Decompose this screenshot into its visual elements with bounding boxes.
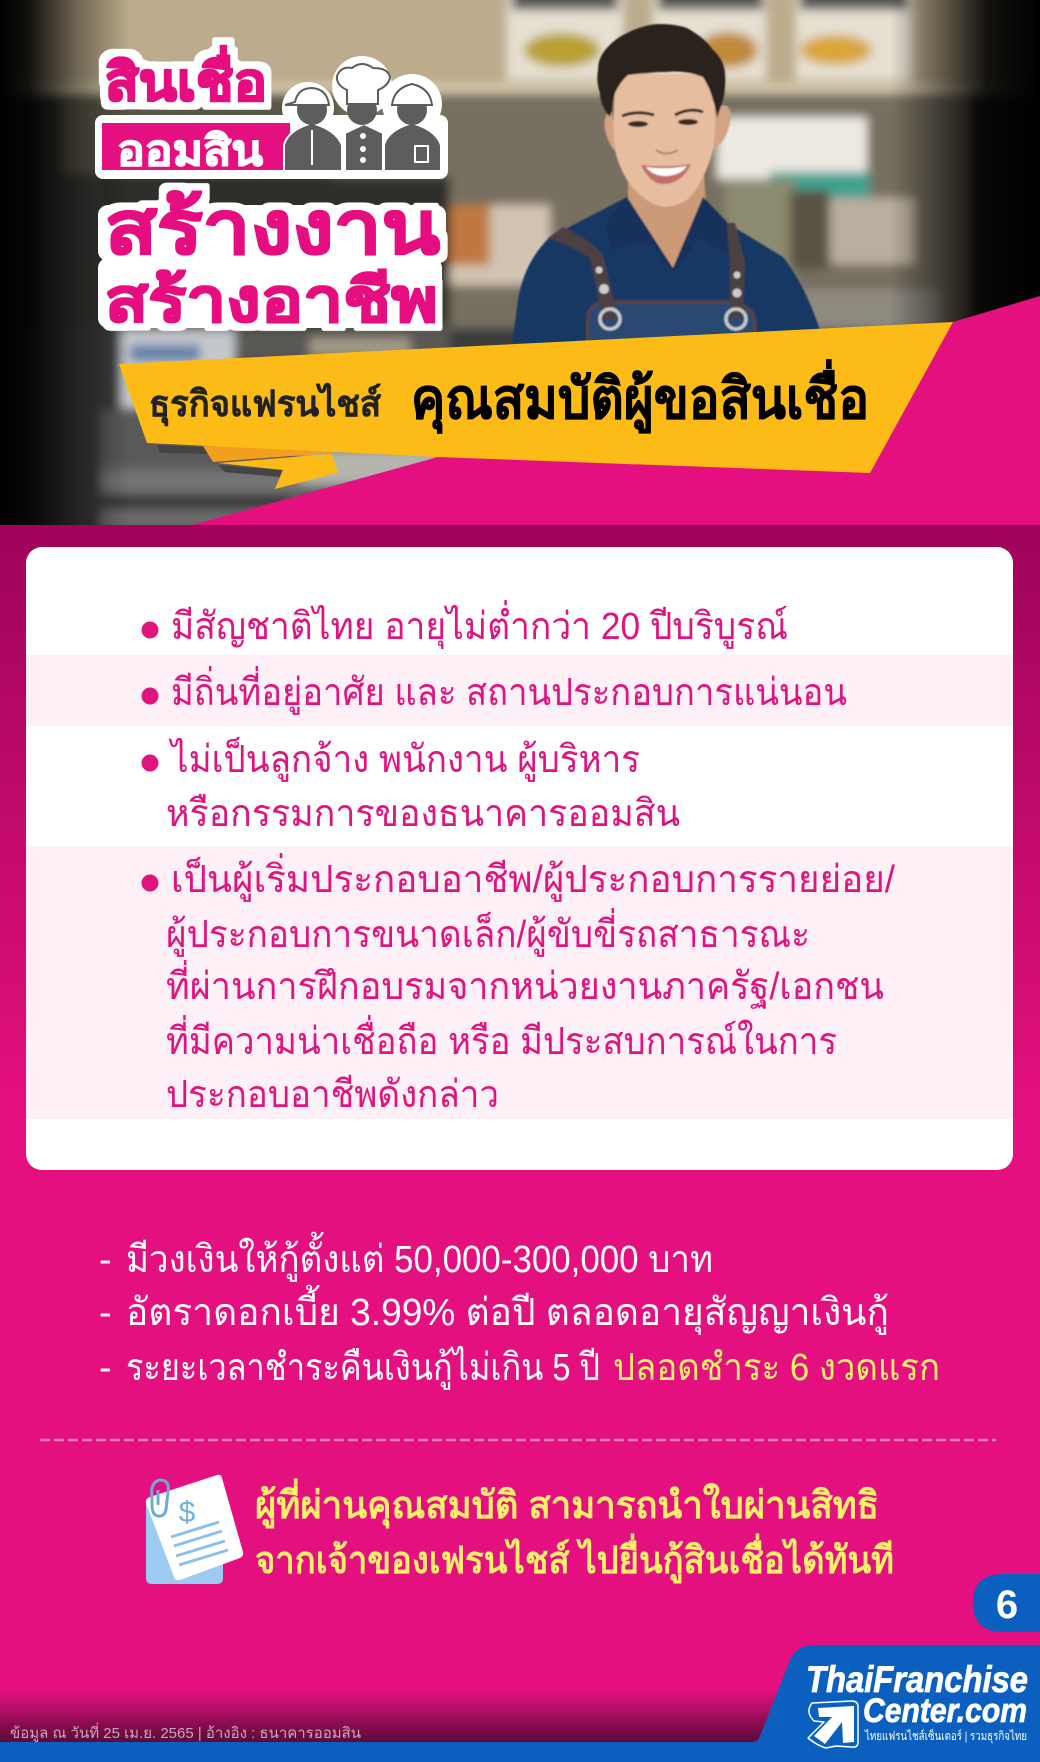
page number tab: [973, 1574, 1040, 1632]
man: apron: [587, 302, 755, 345]
callout: approved applicants: ผู้ที่ผ่านคุณสมบัติ สามารถนำใบผ่านสิทธิ: [255, 1478, 879, 1529]
bullet 4: เป็นผู้เริ่มประกอบอาชีพ/ผู้ประกอบการรายย่อย/: [171, 853, 895, 902]
bullet 3: หรือกรรมการของธนาคารออมสิน: [166, 793, 680, 835]
callout: approved applicants: [255, 1478, 894, 1584]
footer source: ข้อมูล ณ วันที่ 25 เม.ย. 2565 | อ้างอิง : ธนาคารออมสิน: [10, 1722, 361, 1742]
man: eyes: [628, 121, 648, 127]
man: apron straps: [548, 223, 745, 320]
man: shirt: [512, 197, 820, 345]
logo: worker icons: [284, 64, 441, 171]
icon: dollar sign: $: [179, 1496, 196, 1529]
loan terms: อัตราดอกเบี้ย 3.99% ต่อปี ตลอดอายุสัญญาเงินกู้: [126, 1284, 889, 1335]
loan terms: -: [99, 1239, 112, 1281]
banner label: franchise business: ธุรกิจแฟรนไชส์: [149, 382, 381, 427]
footer shadow: [0, 1690, 1040, 1742]
loan terms: -: [99, 1292, 112, 1334]
man: apron rings: [600, 309, 746, 329]
banner title: borrower qualifications: คุณสมบัติผู้ขอสินเชื่อ: [411, 359, 869, 434]
logo: bank name: ออมสิน: [117, 127, 263, 174]
man: ears: [604, 105, 731, 152]
man: brows: [622, 110, 703, 116]
man: collar: [606, 197, 728, 272]
bullet 4: ที่ผ่านการฝึกอบรมจากหน่วยงานภาครัฐ/เอกชน: [166, 960, 884, 1009]
pink diagonal panel: [192, 296, 1040, 525]
campaign logo sticker: [95, 46, 448, 334]
page background: [0, 525, 1040, 1762]
logo: text credit: สินเชื่อ: [105, 46, 267, 112]
header photo background: [0, 0, 1040, 560]
photo: smiling man in apron: [512, 24, 820, 345]
bullet 4: ผู้ประกอบการขนาดเล็ก/ผู้ขับขี่รถสาธารณะ: [166, 908, 810, 957]
panel: qualifications card: [26, 547, 1013, 1170]
bullet 4: ที่มีความน่าเชื่อถือ หรือ มีประสบการณ์ในการ: [166, 1015, 837, 1063]
yellow banner: [119, 322, 953, 473]
man: nose: [656, 150, 678, 154]
loan terms: มีวงเงินให้กู้ตั้งแต่ 50,000-300,000 บาท: [126, 1231, 713, 1282]
logo: white backing: [95, 56, 448, 328]
bullet 4: ประกอบอาชีพดังกล่าว: [166, 1074, 499, 1116]
icon: brand arrow: [808, 1701, 858, 1748]
man: neck: [628, 170, 706, 272]
man: hair: [597, 24, 725, 118]
loan terms: -: [99, 1347, 112, 1389]
page number tab: 6: [996, 1583, 1018, 1627]
callout: approved applicants: จากเจ้าของเฟรนไชส์ ไปยื่นกู้สินเชื่อได้ทันที: [255, 1533, 894, 1584]
logo: create jobs: สร้างงาน: [105, 188, 440, 269]
logo: bank name box: [102, 123, 290, 170]
bullet 4: [142, 853, 895, 1116]
loan terms: ปลอดชำระ 6 งวดแรก: [613, 1347, 940, 1389]
brand logo panel: [0, 1645, 1040, 1762]
icon: document with paperclip: [146, 1475, 243, 1584]
bullet 1: มีสัญชาติไทย อายุไม่ต่ำกว่า 20 ปีบริบูรณ์: [171, 600, 788, 649]
man: smile: [641, 164, 691, 184]
man: face: [614, 73, 715, 207]
bullet 3: ไม่เป็นลูกจ้าง พนักงาน ผู้บริหาร: [168, 736, 640, 782]
loan terms: [99, 1231, 940, 1390]
loan terms: ระยะเวลาชำระคืนเงินกู้ไม่เกิน 5 ปี: [126, 1346, 600, 1390]
ribbon tail: [157, 445, 340, 489]
bullet 3: [142, 736, 680, 835]
bullet 2: มีถิ่นที่อยู่อาศัย และ สถานประกอบการแน่นอน: [171, 666, 847, 715]
logo: create careers: สร้างอาชีพ: [105, 267, 438, 334]
